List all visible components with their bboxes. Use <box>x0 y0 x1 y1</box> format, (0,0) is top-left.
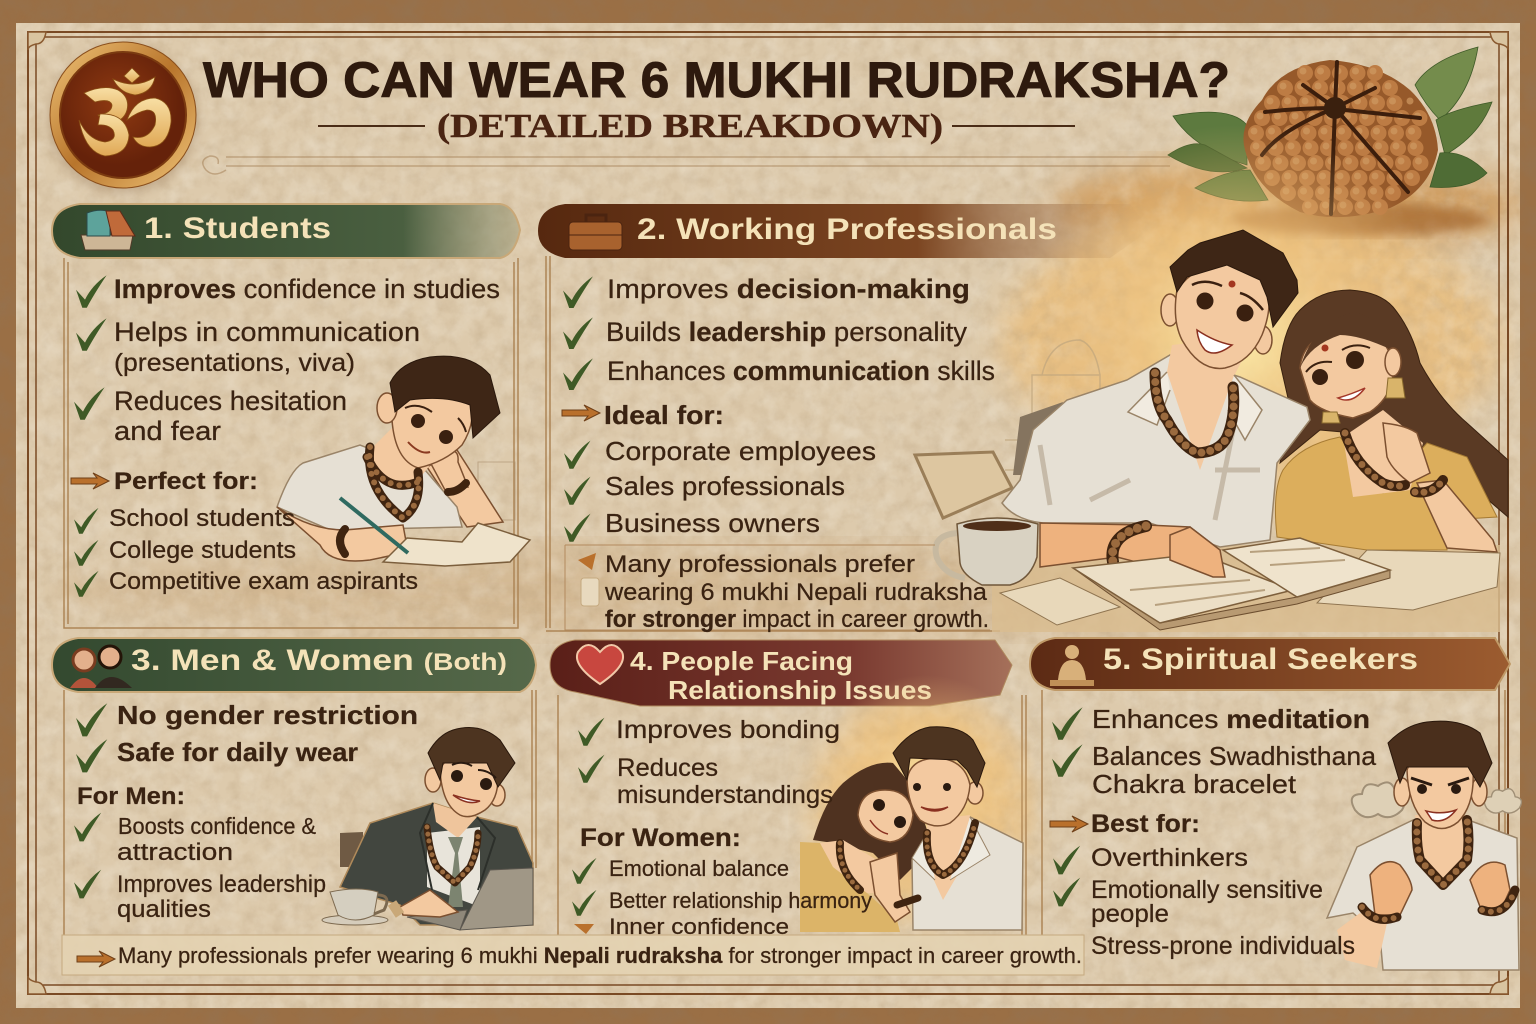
ideal for list <box>562 400 876 542</box>
students checklist: Helps in communication <box>114 317 420 347</box>
man <box>1002 230 1310 577</box>
illustration: student writing <box>277 356 530 566</box>
best for list: Stress-prone individuals <box>1091 932 1355 960</box>
icon: heart <box>577 645 623 684</box>
ideal for list: Ideal for: <box>604 400 724 430</box>
men and women benefits: Safe for daily wear <box>117 737 358 767</box>
illustration: determined young man <box>1327 721 1521 970</box>
professionals note: Many professionals prefer <box>605 551 915 578</box>
illustration: man in suit with laptop <box>322 728 533 930</box>
men and women benefits: No gender restriction <box>117 700 418 730</box>
professionals note: wearing 6 mukhi Nepali rudraksha <box>604 579 988 606</box>
spiritual header: 5. Spiritual Seekers <box>1103 643 1418 676</box>
relationship header: 4. People Facing <box>630 646 853 676</box>
men and women benefits: For Men: <box>77 783 185 810</box>
professionals note <box>565 545 990 633</box>
relationship benefits <box>572 716 872 939</box>
best for list: Overthinkers <box>1091 844 1248 872</box>
relationship benefits: Better relationship harmony <box>609 888 872 913</box>
men and women benefits: Improves leadership <box>117 871 326 898</box>
men and women header: 3. Men & Women (Both) <box>131 644 507 677</box>
title: WHO CAN WEAR 6 MUKHI RUDRAKSHA? <box>203 52 1230 108</box>
students checklist: Improves confidence in studies <box>114 274 500 304</box>
relationship benefits: Improves bonding <box>616 716 840 744</box>
spiritual benefits: Chakra bracelet <box>1092 769 1297 799</box>
relationship benefits: misunderstandings <box>617 781 833 809</box>
papers <box>1000 550 1500 625</box>
relationship benefits: Inner confidence <box>609 914 789 939</box>
relationship header: Relationship Issues <box>668 675 932 705</box>
icon: briefcase <box>569 215 622 250</box>
ideal for list: Business owners <box>605 508 820 538</box>
ideal for list: Sales professionals <box>605 471 845 501</box>
students checklist: and fear <box>114 416 221 446</box>
students checklist: (presentations, viva) <box>114 349 355 377</box>
relationship benefits: Reduces <box>617 754 718 782</box>
open book <box>1073 527 1390 630</box>
icon: rudraksha bead with leaves <box>1168 47 1492 236</box>
students checklist: Reduces hesitation <box>114 386 347 416</box>
relationship header <box>550 640 1012 706</box>
spiritual header <box>1030 638 1510 690</box>
relationship benefits: Emotional balance <box>609 856 789 881</box>
professionals benefits: Improves decision-making <box>607 274 970 304</box>
best for list: Best for: <box>1091 810 1200 838</box>
men and women benefits: qualities <box>117 896 211 923</box>
professionals header: 2. Working Professionals <box>637 213 1057 246</box>
best for list: Emotionally sensitive <box>1091 876 1323 904</box>
illustration: embracing couple <box>800 675 1040 932</box>
perfect for list: College students <box>109 537 296 564</box>
subtitle: (DETAILED BREAKDOWN) <box>437 108 943 145</box>
professionals benefits <box>563 274 995 390</box>
icon: om medallion <box>48 42 198 194</box>
best for list: people <box>1091 900 1169 928</box>
icon: books <box>81 210 135 250</box>
relationship benefits: For Women: <box>580 824 741 852</box>
men and women benefits <box>74 700 418 923</box>
men and women benefits: Boosts confidence & <box>118 813 316 839</box>
chair <box>1013 402 1063 475</box>
ideal for list: Corporate employees <box>605 436 876 466</box>
professionals benefits: Enhances communication skills <box>607 356 995 386</box>
professionals benefits: Builds leadership personality <box>606 317 968 347</box>
illustration: couple with book and tea <box>915 125 1508 632</box>
spiritual benefits <box>1052 704 1377 799</box>
table <box>992 545 1500 632</box>
panel: relationship issues <box>550 640 1040 939</box>
perfect for list: Perfect for: <box>114 468 258 495</box>
spiritual benefits: Enhances meditation <box>1092 704 1370 734</box>
ornament: flourish rule <box>203 156 1170 174</box>
men and women benefits: attraction <box>117 839 233 866</box>
panel: men and women <box>52 638 536 935</box>
students header <box>52 204 520 258</box>
perfect for list: Competitive exam aspirants <box>109 568 418 595</box>
professionals header <box>538 204 1150 258</box>
students header: 1. Students <box>144 212 331 245</box>
tea cup <box>936 518 1038 585</box>
professionals note: for stronger impact in career growth. <box>605 606 989 633</box>
icon: meditating figure <box>1050 645 1094 686</box>
men and women header <box>52 638 536 692</box>
panel: students <box>52 204 530 628</box>
icon: couple <box>70 646 132 688</box>
callout: bottom note <box>62 935 1084 975</box>
perfect for list: School students <box>109 505 295 532</box>
woman <box>1275 290 1508 552</box>
students checklist <box>74 274 500 446</box>
panel: working professionals <box>52 125 1521 975</box>
panel: spiritual seekers <box>1030 638 1521 970</box>
spiritual benefits: Balances Swadhisthana <box>1092 741 1377 771</box>
callout: bottom note: Many professionals prefer wearing 6 mukhi Nepali rudraksha for stronger impact in career growth. <box>118 943 1082 968</box>
tablet <box>915 452 1012 518</box>
perfect for list <box>71 468 418 597</box>
best for list <box>1050 810 1355 960</box>
